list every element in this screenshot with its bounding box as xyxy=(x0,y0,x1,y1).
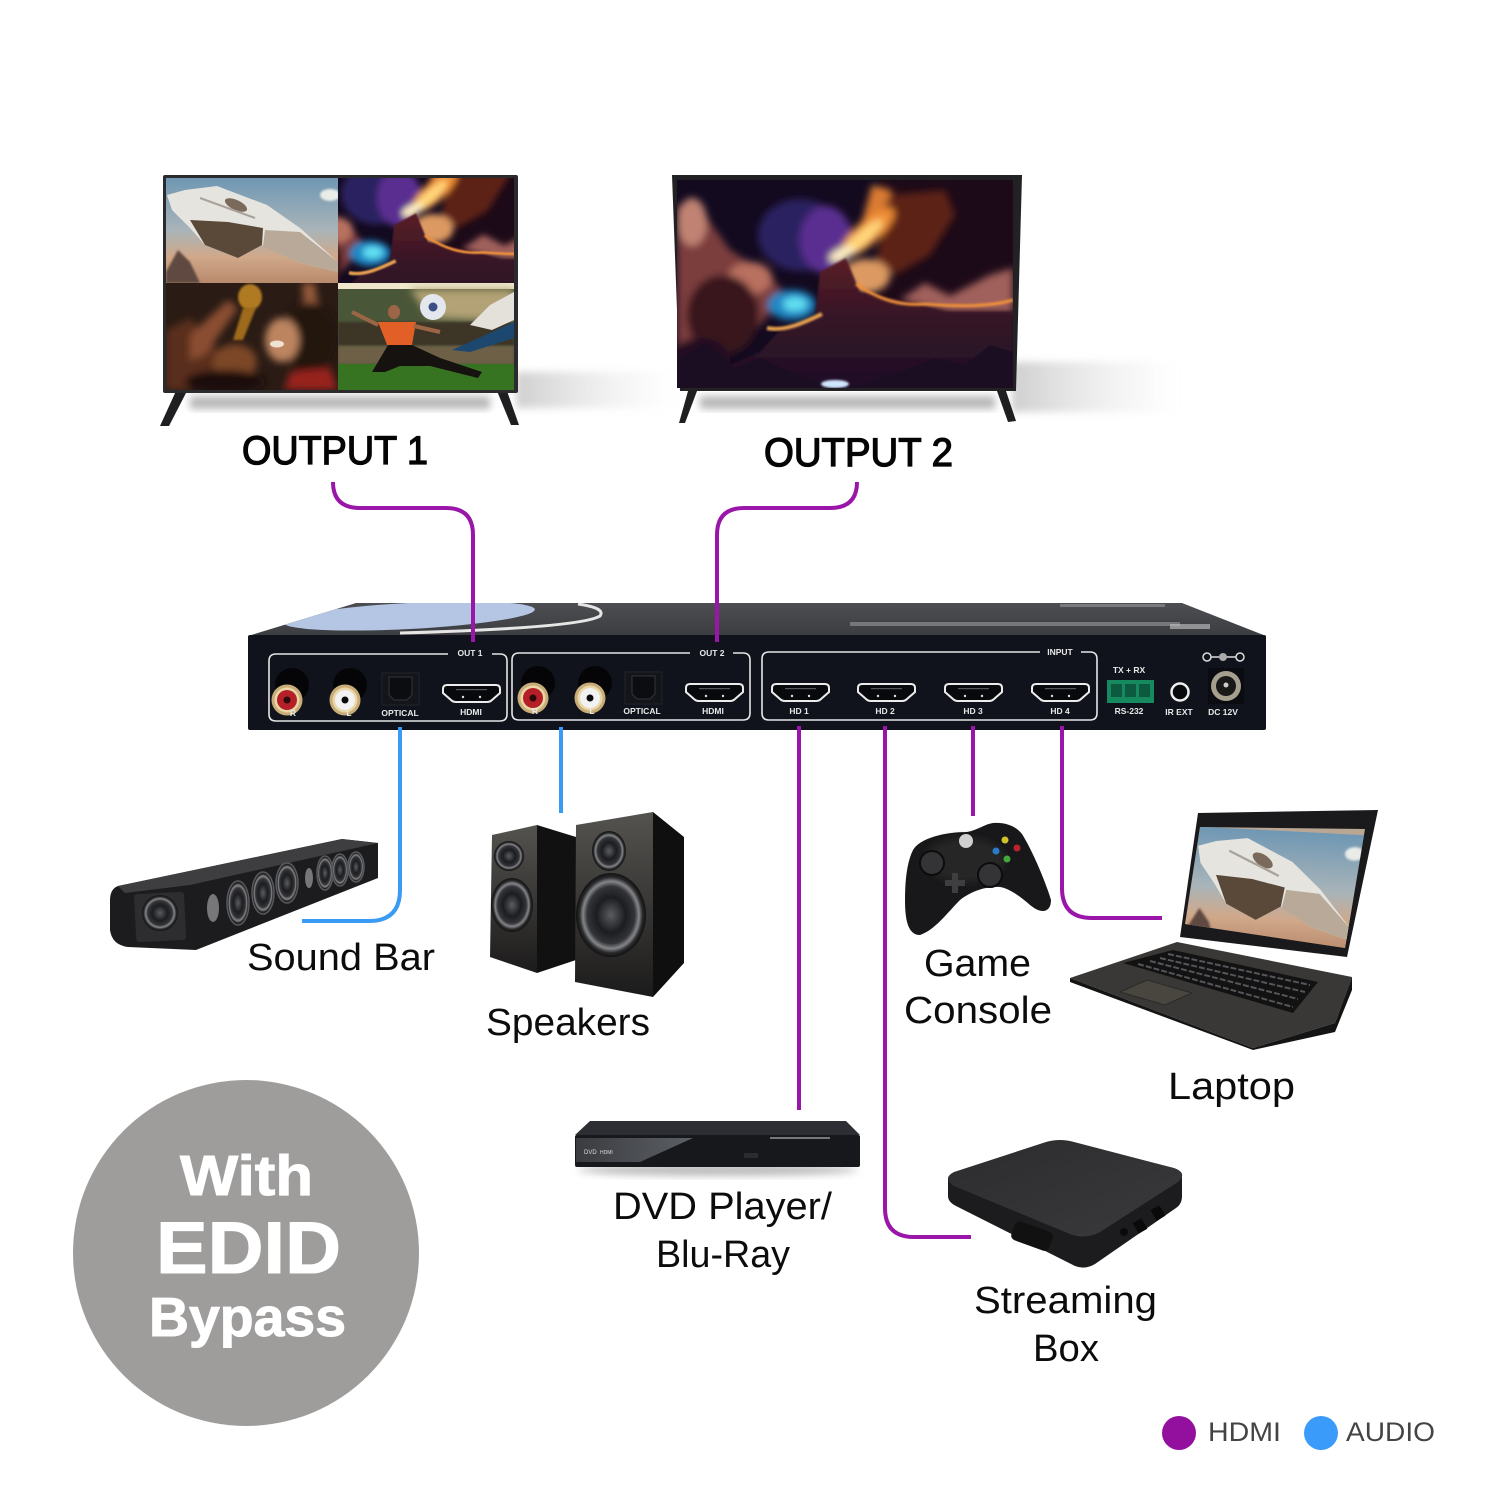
quadrant: spaceship xyxy=(166,178,340,283)
label: Laptop: Laptop xyxy=(1168,1066,1295,1108)
panel group: INPUT: HD 4 xyxy=(1050,706,1070,716)
label: Game Console xyxy=(904,943,1052,1032)
HDMI cables xyxy=(333,482,1162,1237)
panel group: OUT 2: OPTICAL xyxy=(623,706,661,716)
label: Sound Bar: Sound Bar xyxy=(247,937,435,979)
badge: With EDID Bypass: EDID xyxy=(156,1208,341,1289)
quadrant: trophy celebration xyxy=(166,283,338,394)
panel group: INPUT: INPUT xyxy=(1047,647,1074,657)
panel group: OUT 1: R xyxy=(290,708,296,718)
icon: speakers xyxy=(490,812,684,997)
TV 1: quad-view output display xyxy=(160,175,631,426)
panel group: OUT 2: L xyxy=(589,706,595,716)
icon: DVD player: DVD xyxy=(584,1150,597,1156)
label: Streaming Box xyxy=(974,1280,1157,1370)
badge: With EDID Bypass: With xyxy=(180,1144,313,1208)
label: Streaming Box: Box xyxy=(1033,1328,1099,1370)
icon: laptop xyxy=(1070,810,1378,1050)
RS-232 terminal xyxy=(1107,665,1154,716)
icon: DVD player: HDMI xyxy=(600,1150,613,1156)
panel group: OUT 1: OUT 1 xyxy=(457,648,483,658)
heading: OUTPUT 1: OUTPUT 1 xyxy=(242,429,428,473)
panel group: INPUT: HD 3 xyxy=(963,706,983,716)
quadrant: football match xyxy=(338,283,514,390)
heading: OUTPUT 2: OUTPUT 2 xyxy=(764,431,953,475)
label: Game Console: Game xyxy=(924,943,1031,985)
DC 12V power jack xyxy=(1203,653,1244,717)
panel group: OUT 2 xyxy=(512,648,750,720)
legend: AUDIO xyxy=(1346,1417,1435,1447)
device: HDMI matrix switch xyxy=(248,596,1266,730)
label: DVD Player / Blu-Ray xyxy=(613,1186,832,1276)
badge: With EDID Bypass xyxy=(73,1080,419,1426)
panel group: OUT 1 xyxy=(269,648,507,721)
audio cables xyxy=(302,727,561,921)
panel group: OUT 2: HDMI xyxy=(702,706,724,716)
IR EXT jack xyxy=(1165,684,1193,717)
label: DVD Player / Blu-Ray: DVD Player/ xyxy=(613,1186,832,1228)
panel group: INPUT xyxy=(762,647,1097,720)
RS-232 terminal: RS-232 xyxy=(1115,706,1144,716)
icon: streaming box xyxy=(948,1140,1182,1268)
quadrant: nebula xyxy=(338,178,514,283)
label: DVD Player / Blu-Ray: Blu-Ray xyxy=(656,1234,790,1276)
legend: HDMI xyxy=(1208,1417,1281,1447)
infographic: HDMI matrix connection diagram xyxy=(73,175,1434,1450)
RS-232 terminal: TX + RX xyxy=(1113,665,1146,675)
icon: game controller xyxy=(905,823,1051,935)
panel group: INPUT: HD 1 xyxy=(789,706,809,716)
legend xyxy=(1162,1416,1435,1450)
panel group: OUT 2: OUT 2 xyxy=(699,648,725,658)
panel group: OUT 1: OPTICAL xyxy=(381,708,419,718)
panel group: INPUT: HD 2 xyxy=(875,706,895,716)
badge: With EDID Bypass: Bypass xyxy=(149,1286,346,1348)
DC 12V power jack: DC 12V xyxy=(1208,707,1238,717)
label: Streaming Box: Streaming xyxy=(974,1280,1157,1322)
icon: sound bar xyxy=(110,839,378,950)
panel group: OUT 2: R xyxy=(532,706,538,716)
panel group: OUT 1: HDMI xyxy=(460,707,482,717)
TV 2: full-screen nebula display xyxy=(672,175,1132,423)
label: Game Console: Console xyxy=(904,990,1052,1032)
IR EXT jack: IR EXT xyxy=(1165,707,1193,717)
device top surface xyxy=(248,603,1266,636)
panel group: OUT 1: L xyxy=(346,708,352,718)
device front panel xyxy=(248,635,1266,730)
icon: DVD player xyxy=(575,1121,860,1176)
label: Speakers: Speakers xyxy=(486,1002,650,1044)
